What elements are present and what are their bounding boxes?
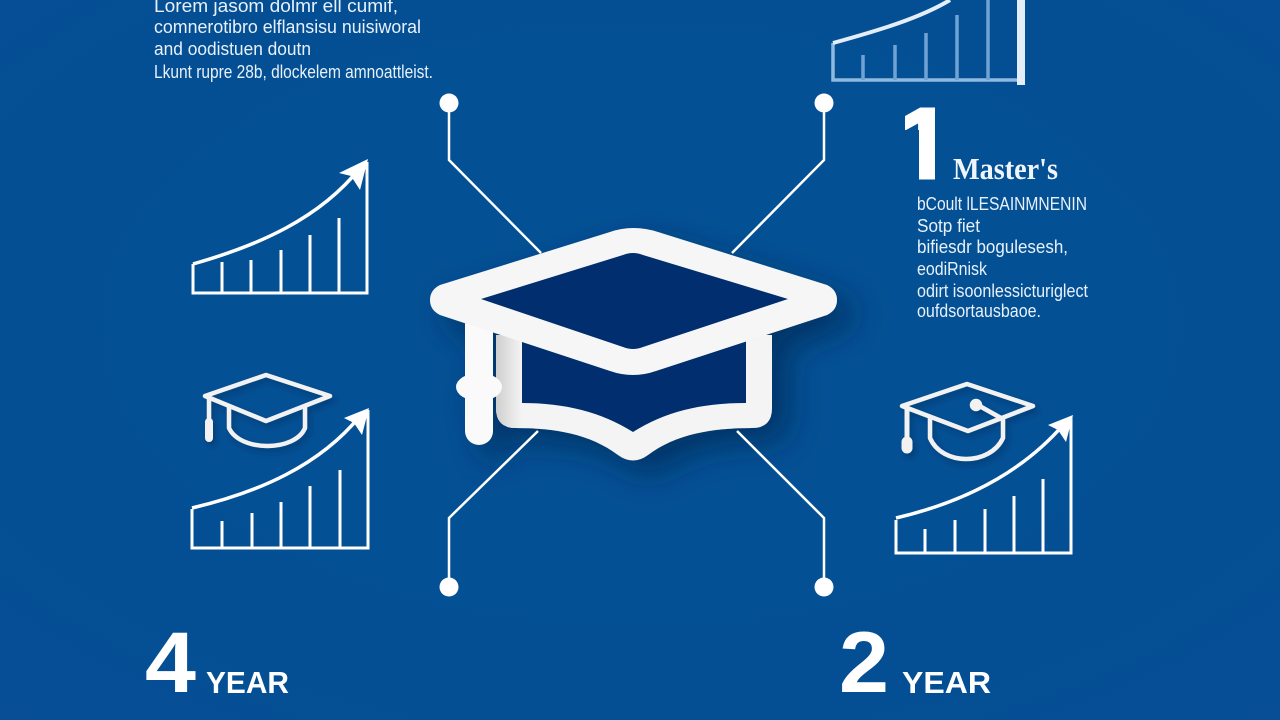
big number 1: 1 bbox=[893, 88, 957, 200]
label: 2 year: 2 bbox=[839, 615, 889, 711]
chart: upper left growth bbox=[193, 159, 368, 293]
text block: right description: bifiesdr bogulesesh, bbox=[917, 237, 1068, 257]
icon: small cap, left bbox=[205, 375, 330, 446]
label: 2 year bbox=[839, 615, 991, 711]
connector: top left bbox=[440, 94, 541, 253]
label: 4 year bbox=[145, 615, 289, 711]
icon: central graduation cap bbox=[430, 228, 837, 460]
cap board bbox=[430, 228, 837, 375]
heading: Master's: Master's bbox=[953, 151, 1058, 186]
cap base bbox=[496, 335, 772, 460]
text block: top left description: and oodistuen doutn bbox=[154, 39, 311, 59]
label: 2 year: YEAR bbox=[902, 665, 991, 700]
label: 4 year: YEAR bbox=[206, 665, 289, 700]
chart: top right growth, cropped bbox=[833, 0, 1022, 85]
chart: lower right growth bbox=[896, 415, 1073, 553]
text block: right description: eodiRnisk bbox=[917, 259, 988, 279]
text block: right description: odirt isoonlessicturiglect bbox=[917, 281, 1088, 301]
text block: right description: Sotp fiet bbox=[917, 216, 980, 236]
connector: bottom right bbox=[737, 431, 834, 596]
text block: right description bbox=[917, 194, 1088, 321]
text block: top left description: Lkunt rupre 28b, dlockelem amnoattleist. bbox=[154, 62, 433, 82]
text block: top left description: comnerotibro elflansisu nuisiworal bbox=[154, 17, 421, 37]
connector: bottom left bbox=[440, 431, 538, 596]
text block: right description: oufdsortausbaoe. bbox=[917, 301, 1041, 321]
icon: small cap, right bbox=[902, 384, 1033, 459]
connector: top right bbox=[732, 94, 834, 253]
text block: right description: bCoult lLESAINMNENIN bbox=[917, 194, 1087, 214]
text block: top left description bbox=[154, 0, 433, 82]
label: 4 year: 4 bbox=[145, 615, 196, 711]
chart: lower left growth bbox=[192, 408, 369, 548]
cap tassel bbox=[456, 300, 502, 445]
